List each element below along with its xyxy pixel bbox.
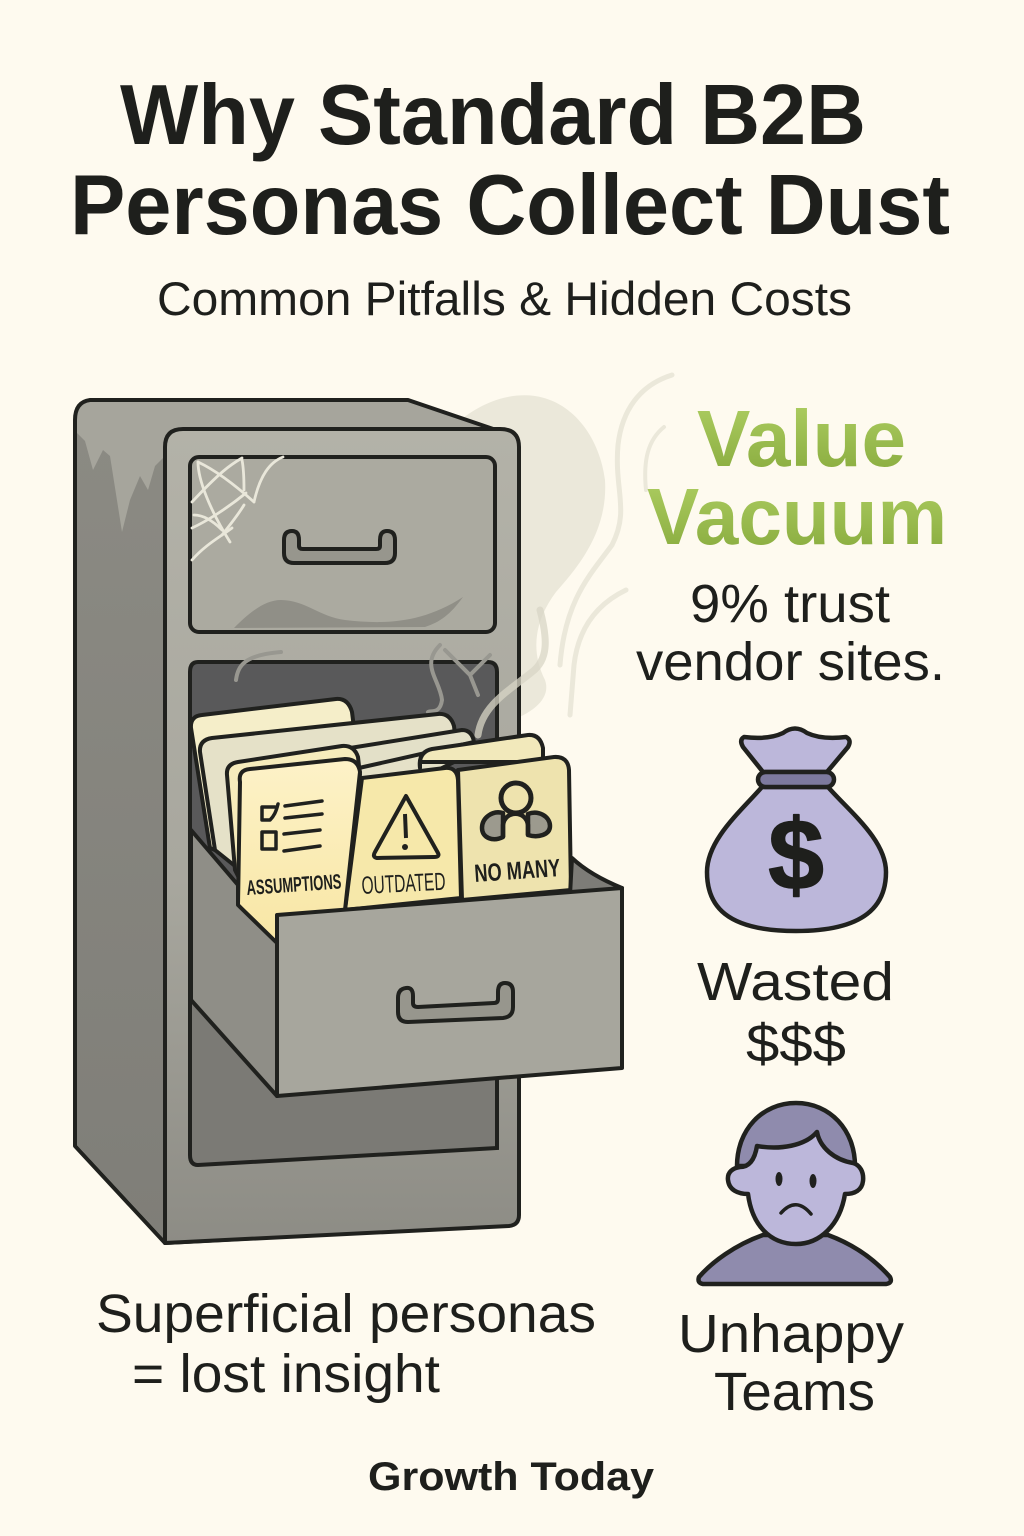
smoke rising from the cabinet [440,375,672,725]
caption: superficial personas: = lost insight [132,1344,440,1404]
title: Why Standard B2B [120,68,866,163]
top drawer handle [284,531,395,563]
label: wasted [697,952,894,1074]
drawer left side [191,830,277,1096]
label: wasted: $$$ [746,1014,846,1074]
title [70,68,950,253]
card: assumptions [238,759,360,945]
caption: superficial personas [96,1284,596,1404]
heading: value vacuum: Vacuum [647,472,947,561]
card: no many: NO MANY [473,854,561,888]
card: outdated: OUTDATED [361,868,446,900]
icon: money bag: $ [768,799,824,911]
label: unhappy teams [678,1304,904,1422]
stat: 9% trust vendor sites: 9% trust [690,574,890,634]
cabinet side and top [75,400,505,1243]
label: unhappy teams: Teams [714,1362,875,1422]
icon: money bag [707,728,886,931]
back cards [191,699,543,880]
footer brand: Growth Today [368,1455,655,1499]
label: wasted: Wasted [697,952,894,1012]
top drawer [190,457,495,632]
smoke wisp over cabinet [478,610,545,735]
cobweb [192,457,283,560]
cabinet front [165,429,519,1243]
card: assumptions: ASSUMPTIONS [246,870,342,900]
drawer right rim [570,858,622,895]
stat: 9% trust vendor sites: vendor sites. [636,632,945,692]
card: outdated [345,768,461,910]
filing cabinet [75,400,622,1243]
label: unhappy teams: Unhappy [678,1304,904,1364]
card: no many [458,757,571,900]
persona cards [191,699,571,945]
stat: 9% trust vendor sites [636,574,945,692]
open drawer [191,830,622,1096]
caption: superficial personas: Superficial personas [96,1284,596,1344]
icon: unhappy person [698,1103,891,1284]
open drawer handle [398,983,513,1022]
heading: value vacuum [647,394,947,561]
drawer dust smear [234,597,463,628]
heading: value vacuum: Value [697,394,906,483]
dark drawer opening [190,610,545,1165]
subtitle: Common Pitfalls & Hidden Costs [157,272,852,325]
drawer front [277,888,622,1096]
title: Personas Collect Dust [70,158,950,253]
